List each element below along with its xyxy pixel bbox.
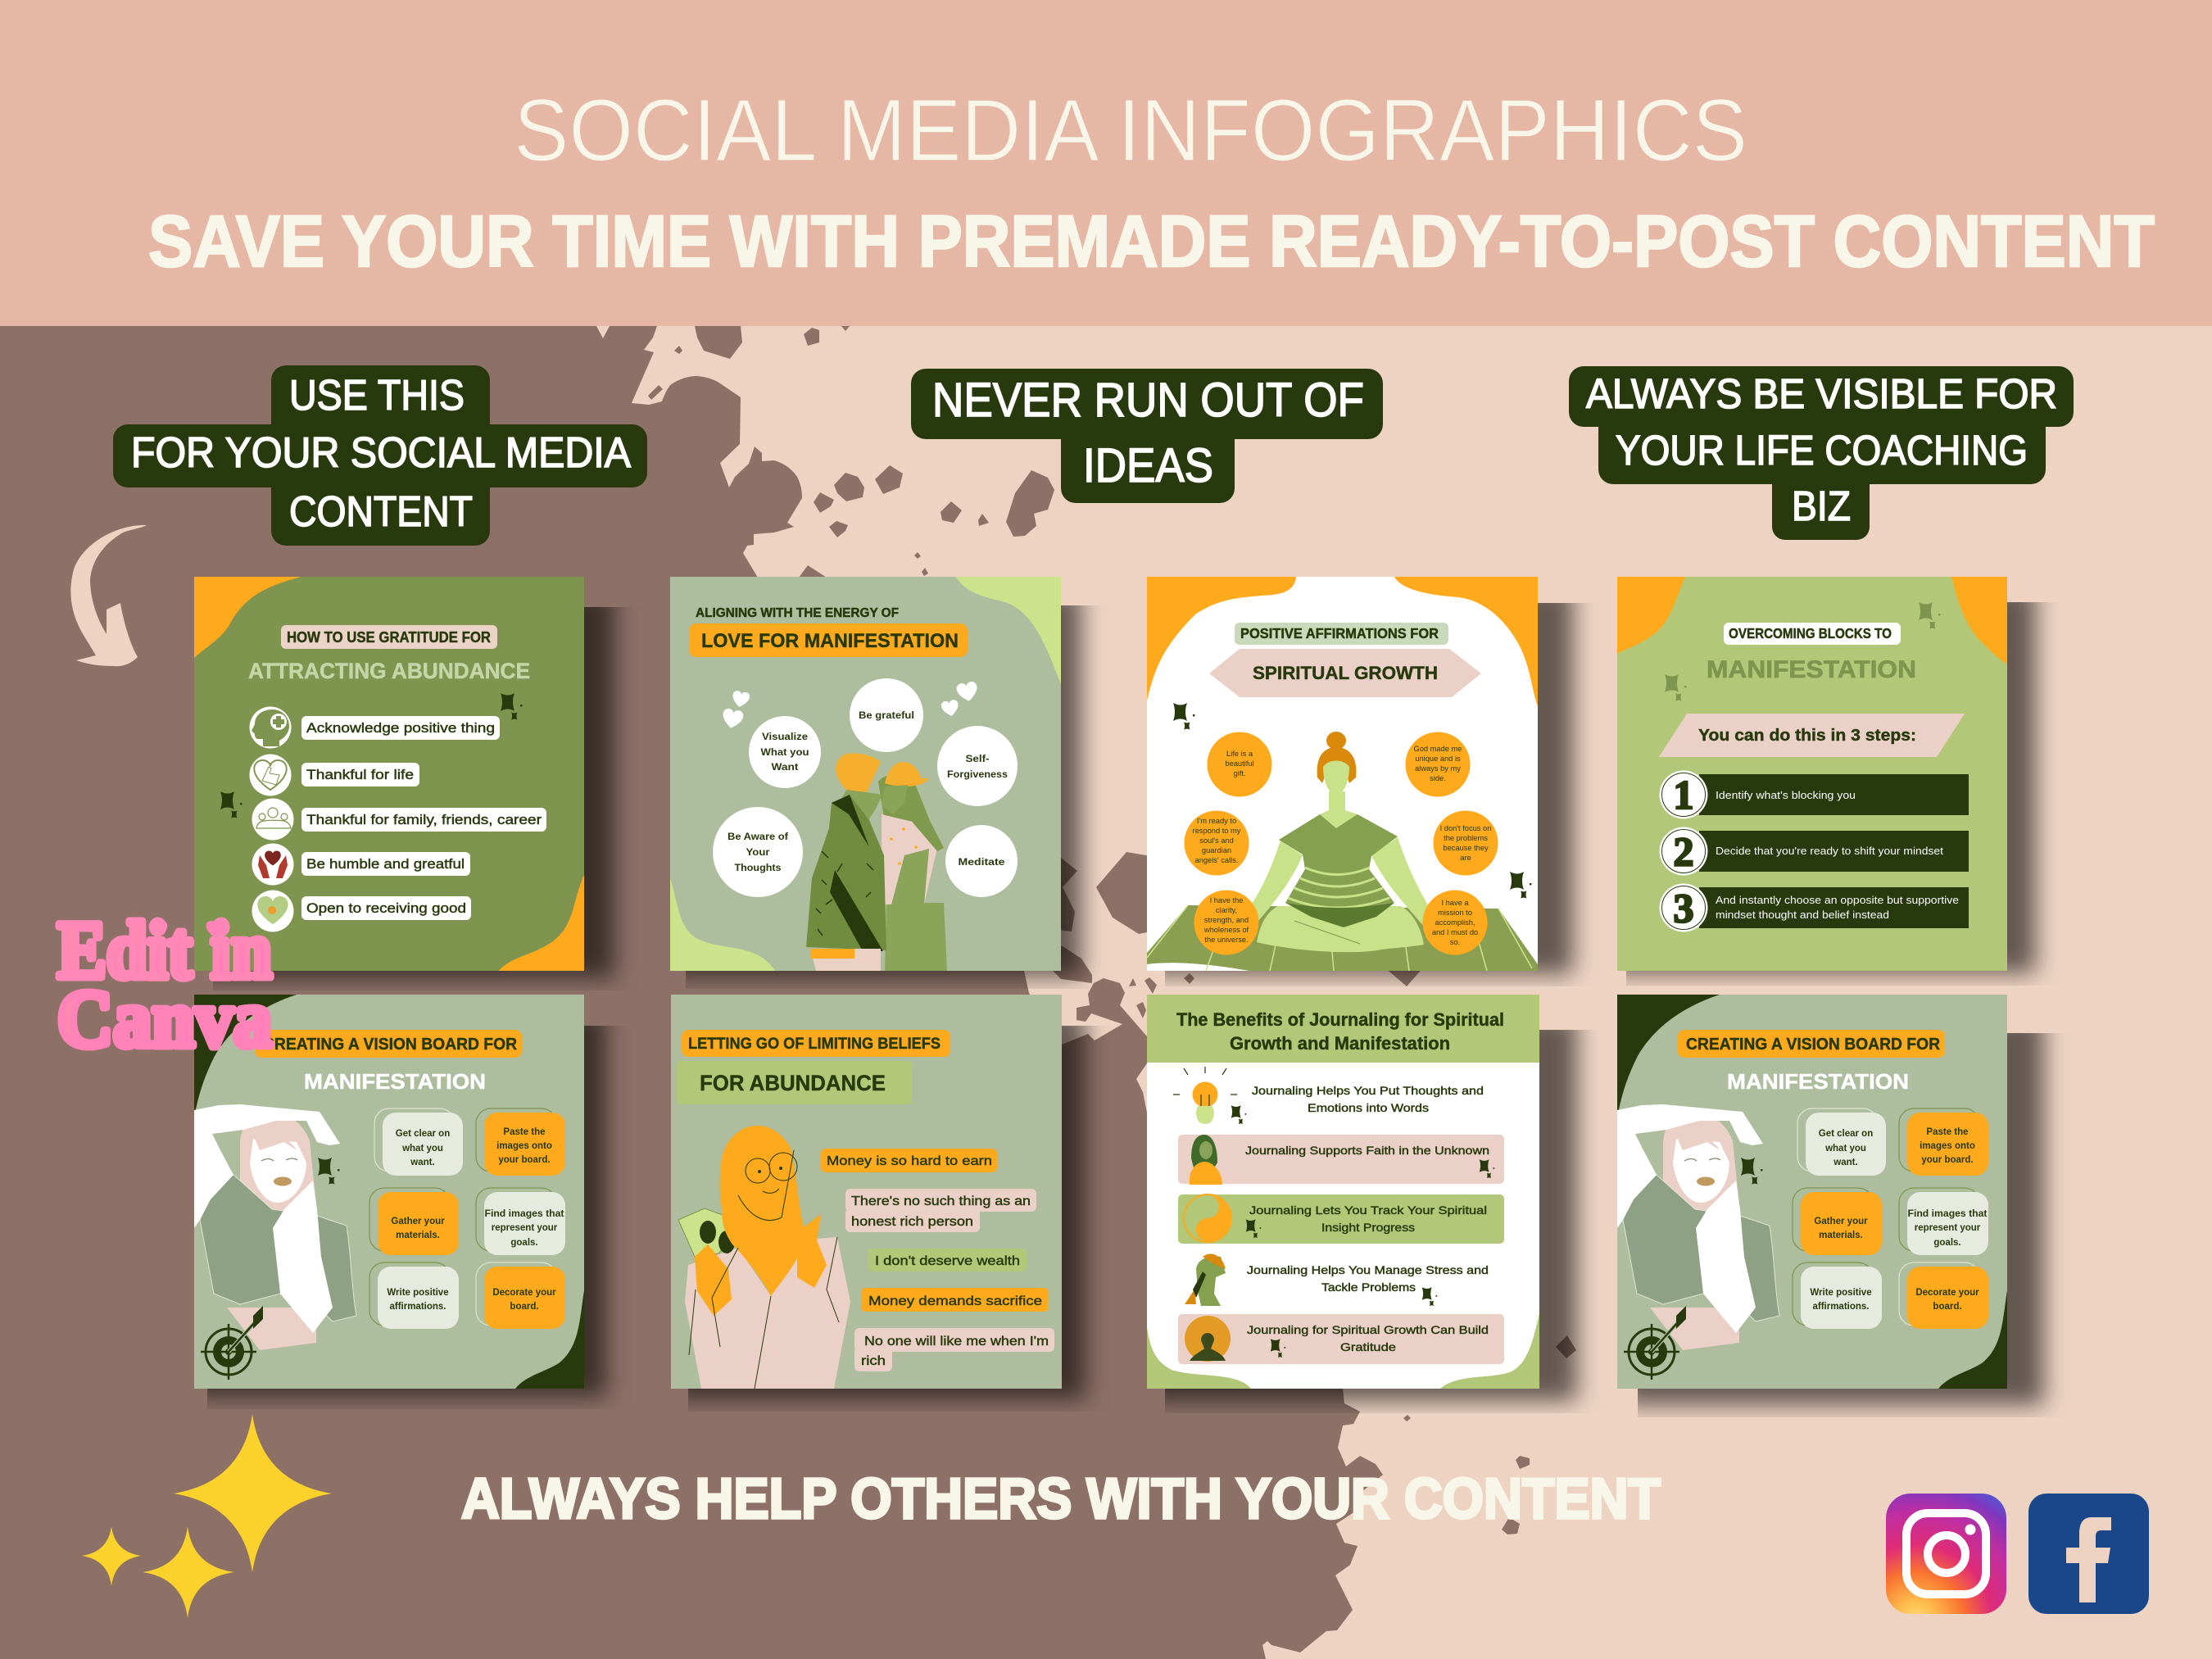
illustration: meditating woman on mat xyxy=(1147,732,1538,971)
steps: 3 xyxy=(1673,885,1694,931)
callout: use this for your social media content: CONTENT xyxy=(289,488,473,536)
illustration: couple xyxy=(806,753,947,971)
header band xyxy=(1147,995,1539,1063)
sparkles xyxy=(1665,602,1940,701)
affirmation bubbles: God made me xyxy=(1414,745,1462,753)
panel: vision board right xyxy=(1617,995,2007,1389)
steps xyxy=(1660,770,1969,932)
banner: You can do this in 3 steps: xyxy=(1698,727,1916,745)
hearts xyxy=(721,681,979,730)
step boxes: Paste the xyxy=(1926,1127,1969,1137)
green heading: FOR ABUNDANCE xyxy=(700,1071,886,1095)
bubbles: Want xyxy=(772,761,798,773)
step boxes: materials. xyxy=(396,1231,440,1240)
row 2 xyxy=(1178,1135,1504,1185)
affirmation bubbles: angels' calls. xyxy=(1195,856,1238,864)
sparkles xyxy=(1173,703,1531,899)
affirmation bubbles: so. xyxy=(1450,938,1460,946)
callout: always be visible for your life coaching biz xyxy=(1569,366,2074,540)
hexagon heading xyxy=(1209,649,1481,697)
affirmation bubbles: guardian xyxy=(1202,846,1231,854)
title: SOCIAL MEDIA INFOGRAPHICS xyxy=(514,80,1747,179)
affirmation bubbles: the universe. xyxy=(1204,936,1249,944)
step boxes: affirmations. xyxy=(389,1302,446,1312)
badge: edit in canva: Edit in xyxy=(57,904,272,995)
step boxes: Get clear on xyxy=(1819,1129,1873,1139)
row 2: Journaling Supports Faith in the Unknown xyxy=(1245,1144,1489,1157)
speech bubbles: I don't deserve wealth xyxy=(875,1254,1020,1268)
list rows xyxy=(249,706,546,932)
affirmation bubbles: soul's and xyxy=(1199,836,1234,845)
pill heading: CREATING A VISION BOARD FOR xyxy=(263,1036,518,1054)
affirmation bubbles: I have a xyxy=(1441,899,1469,907)
row 4: Tackle Problems xyxy=(1321,1281,1416,1294)
affirmation bubbles: beautiful xyxy=(1225,759,1254,768)
list rows: Thankful for life xyxy=(306,767,414,782)
panel: letting go of limiting beliefs xyxy=(671,995,1062,1389)
step boxes: want. xyxy=(1833,1158,1858,1167)
step boxes: Get clear on xyxy=(396,1129,450,1139)
step boxes: Write positive xyxy=(1810,1288,1872,1298)
heading pill: LOVE FOR MANIFESTATION xyxy=(701,630,959,652)
card shadows xyxy=(188,586,2044,1405)
steps: Decide that you're ready to shift your mindset xyxy=(1716,845,1944,857)
badge: edit in canva xyxy=(57,904,272,1064)
bubbles: Forgiveness xyxy=(947,768,1008,780)
step boxes: affirmations. xyxy=(1812,1302,1870,1312)
sparkle xyxy=(1741,1158,1762,1185)
pill heading: OVERCOMING BLOCKS TO xyxy=(1729,625,1892,641)
panel: overcoming blocks xyxy=(1617,577,2007,971)
step boxes: what you xyxy=(401,1144,443,1154)
affirmation bubbles: accomplish, xyxy=(1435,918,1475,927)
step boxes xyxy=(369,1108,565,1329)
callout: always be visible for your life coaching biz: BIZ xyxy=(1792,483,1851,529)
row 3: Insight Progress xyxy=(1321,1221,1415,1234)
heading: ATTRACTING ABUNDANCE xyxy=(248,659,530,683)
step boxes: Paste the xyxy=(503,1127,546,1137)
header band xyxy=(0,0,2212,326)
heading: MANIFESTATION xyxy=(1727,1069,1909,1094)
bubbles: Self- xyxy=(965,753,990,764)
illustration: woman xyxy=(194,1104,356,1350)
affirmation bubbles: mission to xyxy=(1438,909,1472,917)
pill heading xyxy=(281,625,497,649)
step boxes: Decorate your xyxy=(1915,1288,1979,1298)
affirmation bubbles: I'm ready to xyxy=(1197,817,1236,825)
speech bubbles: Money demands sacrifice xyxy=(868,1294,1042,1308)
row 1: Emotions into Words xyxy=(1308,1101,1429,1114)
row 3 xyxy=(1178,1194,1504,1244)
row 4: Journaling Helps You Manage Stress and xyxy=(1247,1263,1489,1276)
affirmation bubbles: strength, and xyxy=(1204,916,1249,924)
step boxes: board. xyxy=(1933,1302,1962,1312)
step boxes: Decorate your xyxy=(492,1288,556,1298)
row 1 xyxy=(1173,1067,1484,1124)
speech bubbles: Money is so hard to earn xyxy=(827,1154,992,1168)
steps: And instantly choose an opposite but supportive xyxy=(1716,895,1959,906)
affirmation bubbles: are xyxy=(1460,854,1471,862)
steps: 1 xyxy=(1673,772,1694,818)
affirmation bubbles: side. xyxy=(1430,774,1446,782)
callout: use this for your social media content: USE THIS xyxy=(289,372,465,419)
bubbles: Be Aware of xyxy=(728,831,789,842)
pill heading: LETTING GO OF LIMITING BELIEFS xyxy=(688,1036,941,1053)
icon: yellow stars xyxy=(82,1414,332,1618)
header band: The Benefits of Journaling for Spiritual xyxy=(1176,1009,1504,1030)
step boxes: goals. xyxy=(510,1238,538,1248)
icon: curved arrow xyxy=(70,525,147,666)
step boxes: board. xyxy=(510,1302,539,1312)
step boxes: represent your xyxy=(1915,1223,1981,1233)
bubbles: What you xyxy=(760,746,809,758)
bubbles: Thoughts xyxy=(734,862,782,873)
step boxes xyxy=(1793,1108,1988,1329)
list rows: Be humble and greatful xyxy=(306,856,465,872)
row 4 xyxy=(1185,1253,1489,1306)
affirmation bubbles xyxy=(1185,732,1498,955)
row 5: Gratitude xyxy=(1340,1340,1396,1353)
affirmation bubbles: always by my xyxy=(1415,764,1461,773)
callout: always be visible for your life coaching biz: ALWAYS BE VISIBLE FOR xyxy=(1586,370,2057,417)
list rows: Thankful for family, friends, career xyxy=(306,812,542,827)
bubbles: Visualize xyxy=(762,731,808,742)
illustration: woman xyxy=(1617,1104,1779,1350)
pill heading: CREATING A VISION BOARD FOR xyxy=(1686,1036,1941,1054)
callout: use this for your social media content xyxy=(113,365,647,546)
steps: Identify what's blocking you xyxy=(1716,790,1856,801)
pill heading xyxy=(1724,623,1901,645)
pill heading: HOW TO USE GRATITUDE FOR xyxy=(287,629,491,646)
callout: never run out of ideas: NEVER RUN OUT OF xyxy=(932,374,1364,427)
bubbles: Be grateful xyxy=(859,709,914,721)
step boxes: images onto xyxy=(496,1141,552,1151)
callout: never run out of ideas xyxy=(911,369,1383,503)
step boxes: Gather your xyxy=(391,1217,445,1226)
step boxes: materials. xyxy=(1819,1231,1863,1240)
speech bubbles: rich xyxy=(861,1354,886,1368)
kicker: ALIGNING WITH THE ENERGY OF xyxy=(696,606,899,620)
affirmation bubbles: and I must do xyxy=(1432,928,1478,936)
icon: target xyxy=(201,1306,263,1380)
callout: use this for your social media content: FOR YOUR SOCIAL MEDIA xyxy=(131,429,631,477)
step boxes: goals. xyxy=(1933,1238,1961,1248)
list rows: Open to receiving good xyxy=(306,900,466,916)
list rows: Acknowledge positive thing xyxy=(306,720,495,736)
affirmation bubbles: I don't focus on xyxy=(1440,824,1491,832)
steps: mindset thought and belief instead xyxy=(1716,909,1889,921)
step boxes: want. xyxy=(410,1158,435,1167)
green heading xyxy=(677,1061,912,1104)
banner xyxy=(1659,714,1965,757)
panel: love for manifestation xyxy=(670,577,1061,971)
speech bubbles: honest rich person xyxy=(851,1215,973,1229)
heading: MANIFESTATION xyxy=(1707,656,1916,683)
bubbles: Your xyxy=(746,846,770,858)
panel: spiritual growth xyxy=(1147,577,1538,971)
sparkles xyxy=(1231,1105,1494,1358)
affirmation bubbles: I have the xyxy=(1210,896,1243,904)
heading: MANIFESTATION xyxy=(304,1069,486,1094)
row 1: Journaling Helps You Put Thoughts and xyxy=(1252,1084,1484,1097)
panel: benefits of journaling xyxy=(1147,995,1539,1389)
icon: instagram xyxy=(1886,1494,2006,1614)
pill heading: POSITIVE AFFIRMATIONS FOR xyxy=(1240,625,1439,641)
step boxes: Find images that xyxy=(1907,1209,1988,1219)
bubbles xyxy=(713,678,1018,897)
pill heading xyxy=(1678,1030,1945,1058)
illustration: woman with money xyxy=(678,1126,850,1389)
callout: always be visible for your life coaching biz: YOUR LIFE COACHING xyxy=(1616,427,2028,474)
background: torn brown paint shape xyxy=(0,326,1576,1659)
callout: never run out of ideas: IDEAS xyxy=(1083,439,1213,492)
affirmation bubbles: Life is a xyxy=(1226,750,1253,758)
step boxes: represent your xyxy=(492,1223,558,1233)
step boxes: Write positive xyxy=(387,1288,449,1298)
affirmation bubbles: the problems xyxy=(1444,834,1488,842)
step boxes: your board. xyxy=(1921,1155,1974,1165)
step boxes: images onto xyxy=(1920,1141,1975,1151)
sparkles xyxy=(220,693,522,818)
step boxes: Find images that xyxy=(485,1209,564,1219)
bubbles: Meditate xyxy=(959,856,1005,868)
speech bubbles xyxy=(821,1149,1054,1371)
speech bubbles: There's no such thing as an xyxy=(851,1194,1031,1208)
affirmation bubbles: because they xyxy=(1443,844,1489,852)
footer tagline: ALWAYS HELP OTHERS WITH YOUR CONTENT xyxy=(461,1466,1661,1530)
row 5: Journaling for Spiritual Growth Can Build xyxy=(1247,1323,1489,1336)
sparkle xyxy=(318,1158,339,1185)
heading pill xyxy=(689,623,968,657)
step boxes: your board. xyxy=(498,1155,551,1165)
steps: 2 xyxy=(1673,828,1694,874)
hexagon heading: SPIRITUAL GROWTH xyxy=(1253,663,1438,683)
affirmation bubbles: wholeness of xyxy=(1203,926,1249,934)
panel: attracting abundance xyxy=(194,577,584,971)
affirmation bubbles: unique and is xyxy=(1415,755,1461,763)
affirmation bubbles: clarity, xyxy=(1216,906,1237,914)
speech bubbles: No one will like me when I'm xyxy=(864,1335,1049,1349)
pill heading xyxy=(682,1030,950,1057)
step boxes: what you xyxy=(1824,1144,1866,1154)
pill heading xyxy=(255,1030,522,1058)
row 3: Journaling Lets You Track Your Spiritual xyxy=(1249,1203,1487,1217)
header band: Growth and Manifestation xyxy=(1230,1033,1450,1054)
affirmation bubbles: respond to my xyxy=(1193,827,1241,835)
icon: target xyxy=(1624,1306,1686,1380)
panel: vision board left xyxy=(194,995,584,1389)
step boxes: Gather your xyxy=(1814,1217,1868,1226)
affirmation bubbles: gift. xyxy=(1234,769,1245,777)
badge: edit in canva: Canva xyxy=(57,973,272,1064)
row 5 xyxy=(1178,1314,1504,1364)
icon: facebook xyxy=(2028,1494,2149,1614)
